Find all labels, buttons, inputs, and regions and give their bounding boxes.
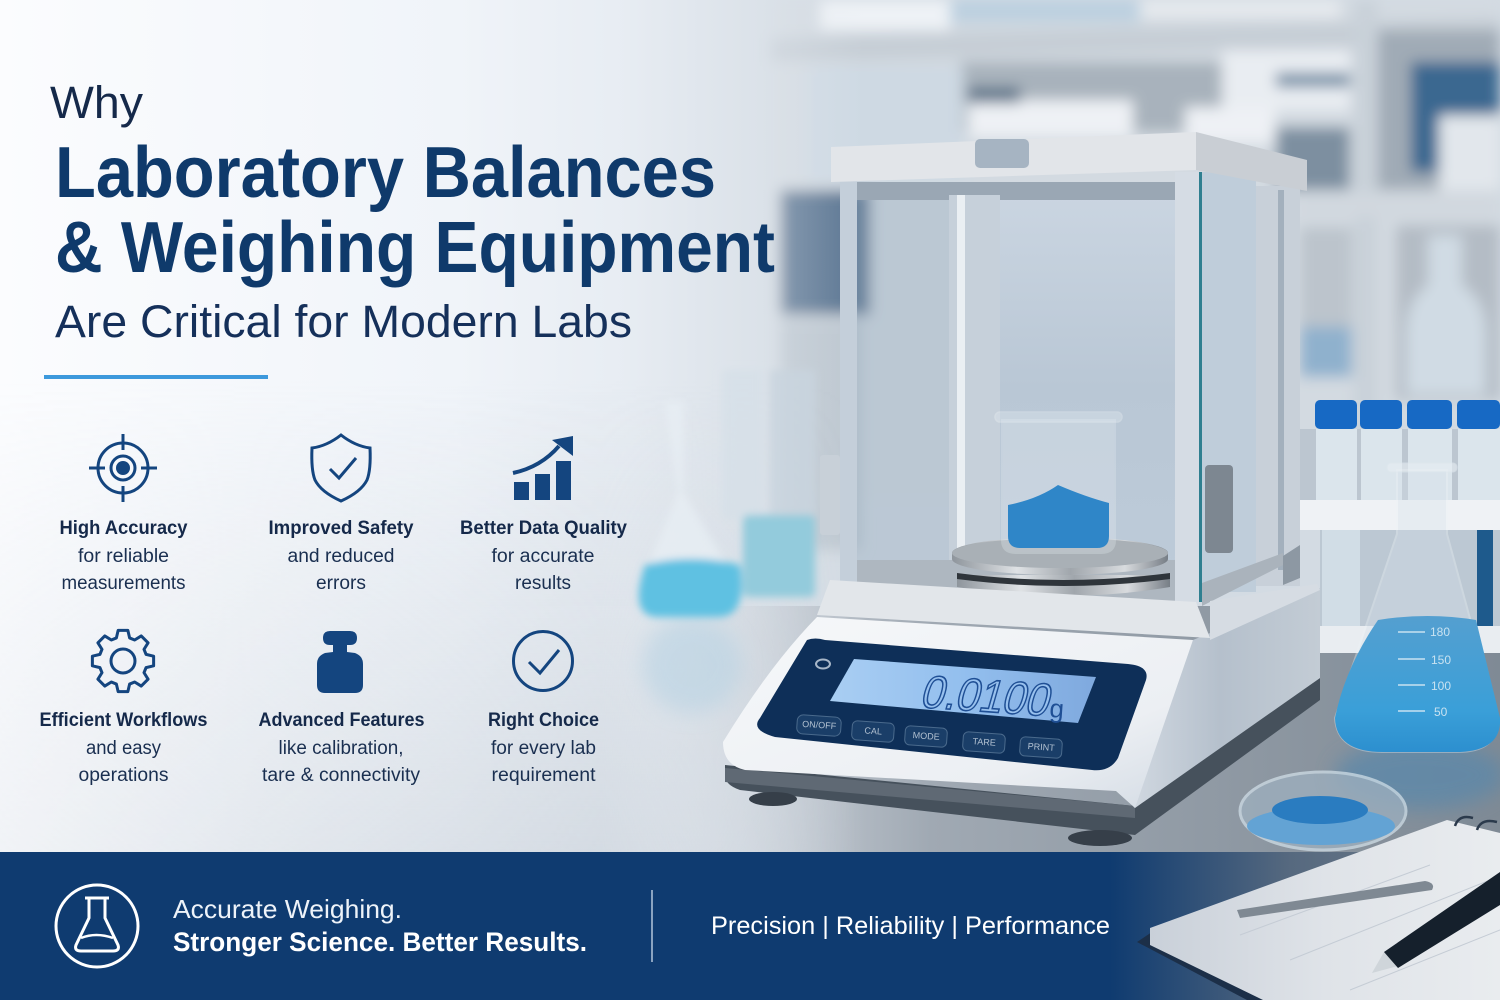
tagline <box>173 894 587 957</box>
icon: shield <box>312 435 370 501</box>
table surface <box>0 606 1500 860</box>
lcd display: g <box>1049 693 1065 724</box>
title underline <box>44 375 268 379</box>
title: & Weighing Equipment <box>55 208 775 288</box>
benefit: advanced features <box>258 631 424 786</box>
glass flask with blue liquid: 180 <box>1430 625 1450 639</box>
laboratory balance <box>723 132 1320 846</box>
values: Precision | Reliability | Performance <box>711 912 1110 940</box>
benefit: efficient workflows: and easy <box>86 738 161 759</box>
benefit: better data quality <box>460 436 627 594</box>
benefit: better data quality: Better Data Quality <box>460 518 627 539</box>
icon: target <box>89 434 157 502</box>
petri dish <box>1240 772 1406 850</box>
lcd display: 0.0100 <box>916 666 1058 726</box>
benefit: right choice: requirement <box>492 765 596 786</box>
title: Are Critical for Modern Labs <box>55 296 632 347</box>
title: Laboratory Balances <box>55 133 716 213</box>
side handles <box>820 455 840 535</box>
benefit: improved safety: errors <box>316 573 366 594</box>
benefit: improved safety: and reduced <box>288 546 394 567</box>
glass flask with blue liquid: 100 <box>1431 679 1451 693</box>
benefit: right choice <box>488 632 599 786</box>
benefit: high accuracy: measurements <box>62 573 186 594</box>
lid <box>831 132 1307 191</box>
icon: check circle <box>514 632 572 690</box>
blurred laboratory shelves <box>770 0 1500 550</box>
tagline: Accurate Weighing. <box>173 894 402 924</box>
balance floor <box>857 560 1175 602</box>
glass flask with blue liquid: 150 <box>1431 653 1451 667</box>
control panel: TARE <box>972 736 996 748</box>
benefit: advanced features: Advanced Features <box>258 710 424 731</box>
benefit: high accuracy <box>60 434 188 594</box>
control panel: PRINT <box>1027 741 1056 753</box>
icon: flask badge <box>56 885 138 967</box>
weighing pan <box>952 537 1170 596</box>
benefit: right choice: for every lab <box>491 738 596 759</box>
floor shading <box>0 534 714 852</box>
lcd display <box>830 659 1096 726</box>
glass flask with blue liquid <box>1335 463 1500 752</box>
lid latch <box>975 139 1029 168</box>
icon: growth chart <box>513 436 573 500</box>
icon: gear <box>92 630 154 692</box>
benefit: improved safety: Improved Safety <box>268 518 414 539</box>
benefit: advanced features: tare & connectivity <box>262 765 420 786</box>
glass flask with blue liquid: 50 <box>1434 705 1448 719</box>
notebook and pen <box>1137 817 1500 1000</box>
base body <box>723 545 1320 846</box>
benefit: better data quality: results <box>515 573 571 594</box>
title: Why <box>50 77 144 128</box>
benefit: high accuracy: for reliable <box>78 546 169 567</box>
benefit: better data quality: for accurate <box>492 546 594 567</box>
benefit: efficient workflows: operations <box>78 765 168 786</box>
control panel: MODE <box>912 730 940 742</box>
tagline: Stronger Science. Better Results. <box>173 927 587 957</box>
blurred background flasks <box>639 370 815 713</box>
test tube rack <box>1300 400 1500 653</box>
icon: calibration weight <box>317 631 363 693</box>
footer band <box>0 817 1500 1000</box>
benefit: advanced features: like calibration, <box>278 738 404 759</box>
benefit: improved safety <box>268 435 414 594</box>
title <box>50 77 775 347</box>
flask reflection on table <box>1335 741 1500 809</box>
beaker with blue powder <box>995 412 1122 553</box>
benefit: efficient workflows: Efficient Workflows <box>40 710 208 731</box>
buttons <box>796 714 1063 758</box>
control panel: CAL <box>864 725 882 737</box>
benefit: right choice: Right Choice <box>488 710 599 731</box>
benefit: efficient workflows <box>40 630 208 786</box>
white left fade <box>0 0 1200 860</box>
control panel <box>757 638 1147 770</box>
control panel: ON/OFF <box>802 719 837 731</box>
benefit: high accuracy: High Accuracy <box>60 518 188 539</box>
draft shield glass <box>840 172 1300 604</box>
